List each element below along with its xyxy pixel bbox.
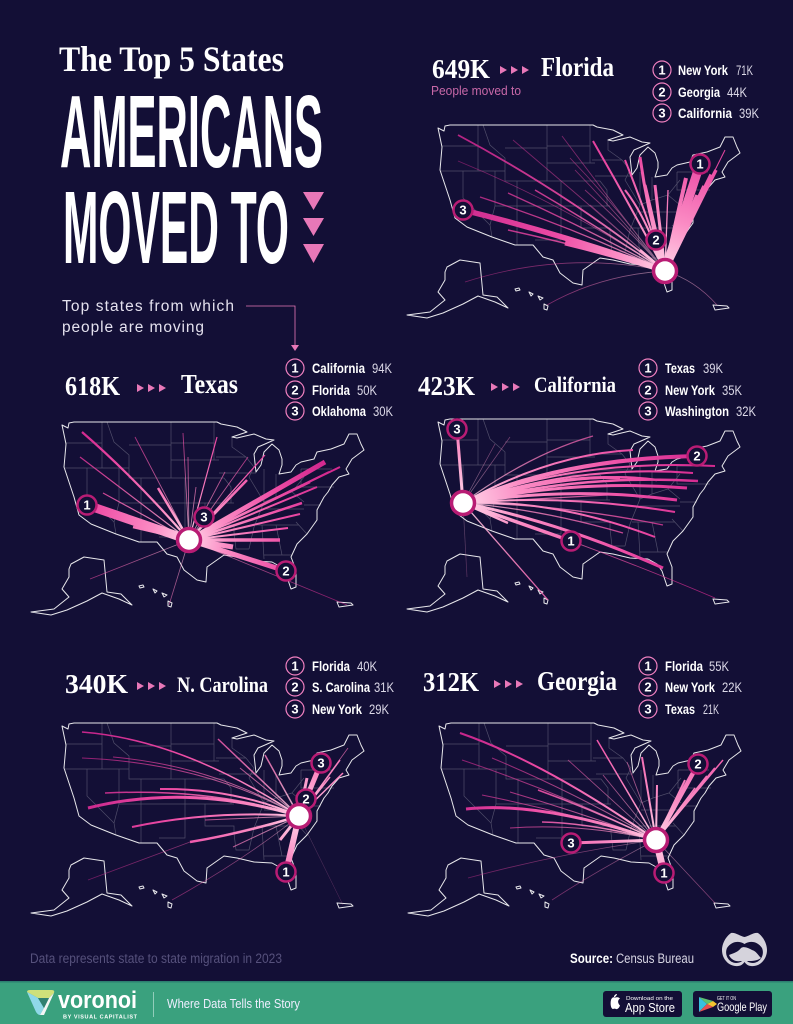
panel: Georgia — [408, 657, 742, 916]
legend: California origins: 39K — [703, 361, 723, 376]
badge: California — [78, 496, 96, 514]
badge: New York: 2 — [693, 448, 701, 464]
heading: Florida: Florida — [541, 52, 614, 82]
title: The Top 5 States — [59, 39, 284, 79]
icon: title down arrows — [303, 192, 324, 263]
legend: Florida origins: 1 — [658, 62, 666, 78]
legend: Georgia origins: New York — [665, 680, 715, 695]
legend: Florida origins: New York — [678, 63, 728, 78]
legend: Florida origins: Georgia — [678, 85, 720, 100]
legend: California origins: 32K — [736, 404, 756, 419]
legend: Texas origins: California — [312, 361, 365, 376]
legend: Georgia origins: Florida — [665, 659, 703, 674]
badge: South Carolina: 2 — [302, 792, 310, 806]
badge: Florida — [654, 864, 674, 882]
panel: Texas — [31, 359, 393, 615]
heading: California: 423K — [418, 371, 475, 401]
footer bar — [0, 981, 793, 1024]
badge: Georgia: 2 — [652, 232, 660, 248]
legend: California origins: New York — [665, 383, 715, 398]
legend: North Carolina origins: 31K — [374, 680, 394, 695]
legend: North Carolina origins: 1 — [291, 658, 299, 674]
panel: California — [407, 359, 756, 612]
legend: California origins: Texas — [665, 361, 695, 376]
badge: Washington — [448, 420, 466, 438]
hub: Texas — [178, 528, 200, 552]
legend: Texas origins: Florida — [312, 383, 350, 398]
map: Florida flows — [407, 125, 740, 318]
heading: Georgia: Georgia — [537, 666, 617, 696]
annotation: top origin states: people are moving — [62, 319, 204, 336]
icon: voronoi logo — [27, 990, 54, 1015]
legend: Florida origins: 3 — [658, 106, 666, 120]
map: North Carolina flows — [31, 723, 364, 916]
badge: South Carolina — [296, 790, 316, 808]
legend: Texas origins: 1 — [291, 360, 299, 376]
badge: Texas — [562, 532, 580, 550]
legend: Florida origins: 2 — [658, 84, 666, 100]
heading: North Carolina: N. Carolina — [177, 672, 268, 697]
button: Google Play: GET IT ON — [717, 996, 736, 1002]
badge: New York — [688, 754, 708, 774]
badge: Florida — [276, 862, 296, 882]
legend: Georgia origins — [639, 657, 742, 718]
text: AMERICANS — [60, 74, 323, 189]
legend: California origins: Washington — [665, 404, 729, 419]
legend: Georgia origins: 22K — [722, 680, 742, 695]
heading: Texas: Texas — [181, 369, 238, 399]
legend: North Carolina origins: 2 — [291, 680, 299, 694]
wordmark: voronoi: voronoi — [58, 987, 137, 1014]
legend: Georgia origins: 2 — [644, 680, 652, 694]
wordmark: voronoi: BY VISUAL CAPITALIST — [63, 1014, 138, 1020]
badge: California: 1 — [83, 498, 91, 512]
legend: Florida origins: 44K — [727, 85, 747, 100]
title — [59, 39, 323, 285]
legend: California origins: 3 — [644, 404, 652, 418]
annotation: top origin states — [62, 298, 299, 351]
heading: Texas: 618K — [65, 371, 120, 401]
badge: Florida: 1 — [660, 866, 668, 880]
button: App Store: App Store — [625, 1000, 675, 1015]
hub: North Carolina — [288, 804, 310, 828]
legend: North Carolina origins: New York — [312, 702, 362, 717]
heading: North Carolina — [65, 669, 268, 699]
legend: Texas origins: Oklahoma — [312, 404, 366, 419]
badge: Texas: 3 — [567, 836, 575, 850]
heading: Texas — [65, 369, 238, 401]
heading: Georgia — [423, 666, 617, 697]
hub: Florida — [654, 260, 676, 282]
legend: Texas origins — [286, 359, 393, 420]
button: App Store: Download on the — [626, 996, 673, 1002]
legend: North Carolina origins: 29K — [369, 702, 389, 717]
legend: North Carolina origins: 40K — [357, 659, 377, 674]
legend: Texas origins: 94K — [372, 361, 392, 376]
heading: North Carolina: 340K — [65, 669, 128, 699]
legend: Georgia origins: Texas — [665, 702, 695, 717]
legend: California origins: 2 — [644, 382, 652, 398]
legend: North Carolina origins — [286, 657, 394, 718]
source — [570, 951, 694, 966]
badge: Texas — [562, 834, 580, 852]
heading: Florida — [431, 52, 614, 98]
legend: North Carolina origins: S. Carolina — [312, 680, 370, 695]
legend: North Carolina origins: 3 — [291, 702, 299, 716]
heading: California: California — [534, 372, 616, 397]
legend: Florida origins: 71K — [736, 63, 753, 78]
map: California flows — [407, 419, 740, 612]
legend: Texas origins: 50K — [357, 383, 377, 398]
tagline: Where Data Tells the Story — [167, 996, 300, 1011]
badge: New York: 3 — [317, 756, 325, 770]
legend: North Carolina origins: Florida — [312, 659, 350, 674]
legend: Georgia origins: 21K — [703, 702, 719, 717]
heading: Georgia: 312K — [423, 667, 479, 697]
legend: Texas origins: 2 — [291, 382, 299, 398]
panel: Florida — [407, 52, 759, 318]
legend: California origins — [639, 359, 756, 420]
legend: Georgia origins: 1 — [644, 658, 652, 674]
map: Texas flows — [31, 422, 364, 615]
badge: Oklahoma — [194, 508, 214, 526]
badge: Florida: 2 — [282, 564, 290, 578]
badge: Washington: 3 — [453, 422, 461, 436]
hub: California — [452, 492, 474, 514]
legend: Florida origins — [653, 61, 759, 122]
note: data year: Data represents state to state migration in 2023 — [30, 951, 282, 966]
badge: New York — [688, 446, 706, 466]
button: Google Play: Google Play — [717, 1000, 767, 1014]
source: Census Bureau — [616, 951, 694, 966]
panel: North Carolina — [31, 657, 394, 916]
badge: Georgia — [646, 230, 666, 250]
badge: New York — [690, 154, 710, 174]
badge: New York: 2 — [694, 756, 702, 772]
badge: Florida — [276, 562, 296, 580]
legend: Texas origins: 3 — [291, 404, 299, 418]
legend: Florida origins: 39K — [739, 106, 759, 121]
map: Georgia flows — [408, 723, 741, 916]
text: MOVED TO — [63, 170, 289, 285]
button: App Store — [603, 991, 682, 1017]
annotation: top origin states: Top states from which — [62, 298, 234, 315]
badge: Oklahoma: 3 — [200, 510, 208, 524]
badge: Texas: 1 — [567, 534, 575, 548]
heading: Florida: 649K — [432, 54, 490, 84]
heading: California — [418, 371, 616, 401]
legend: Georgia origins: 3 — [644, 702, 652, 716]
badge: California — [454, 200, 472, 220]
heading: Florida: People moved to — [431, 83, 521, 98]
legend: California origins: 1 — [644, 360, 652, 376]
hub: Georgia — [644, 828, 668, 852]
button: Google Play — [693, 991, 772, 1017]
legend: Florida origins: California — [678, 106, 732, 121]
badge: New York — [312, 754, 330, 772]
legend: Georgia origins: 55K — [709, 659, 729, 674]
badge: California: 3 — [459, 202, 467, 218]
badge: New York: 1 — [696, 156, 704, 172]
legend: Texas origins: 30K — [373, 404, 393, 419]
legend: California origins: 35K — [722, 383, 742, 398]
icon: mask logo — [722, 933, 767, 966]
badge: Florida: 1 — [282, 864, 290, 880]
source: Source: — [570, 951, 613, 966]
